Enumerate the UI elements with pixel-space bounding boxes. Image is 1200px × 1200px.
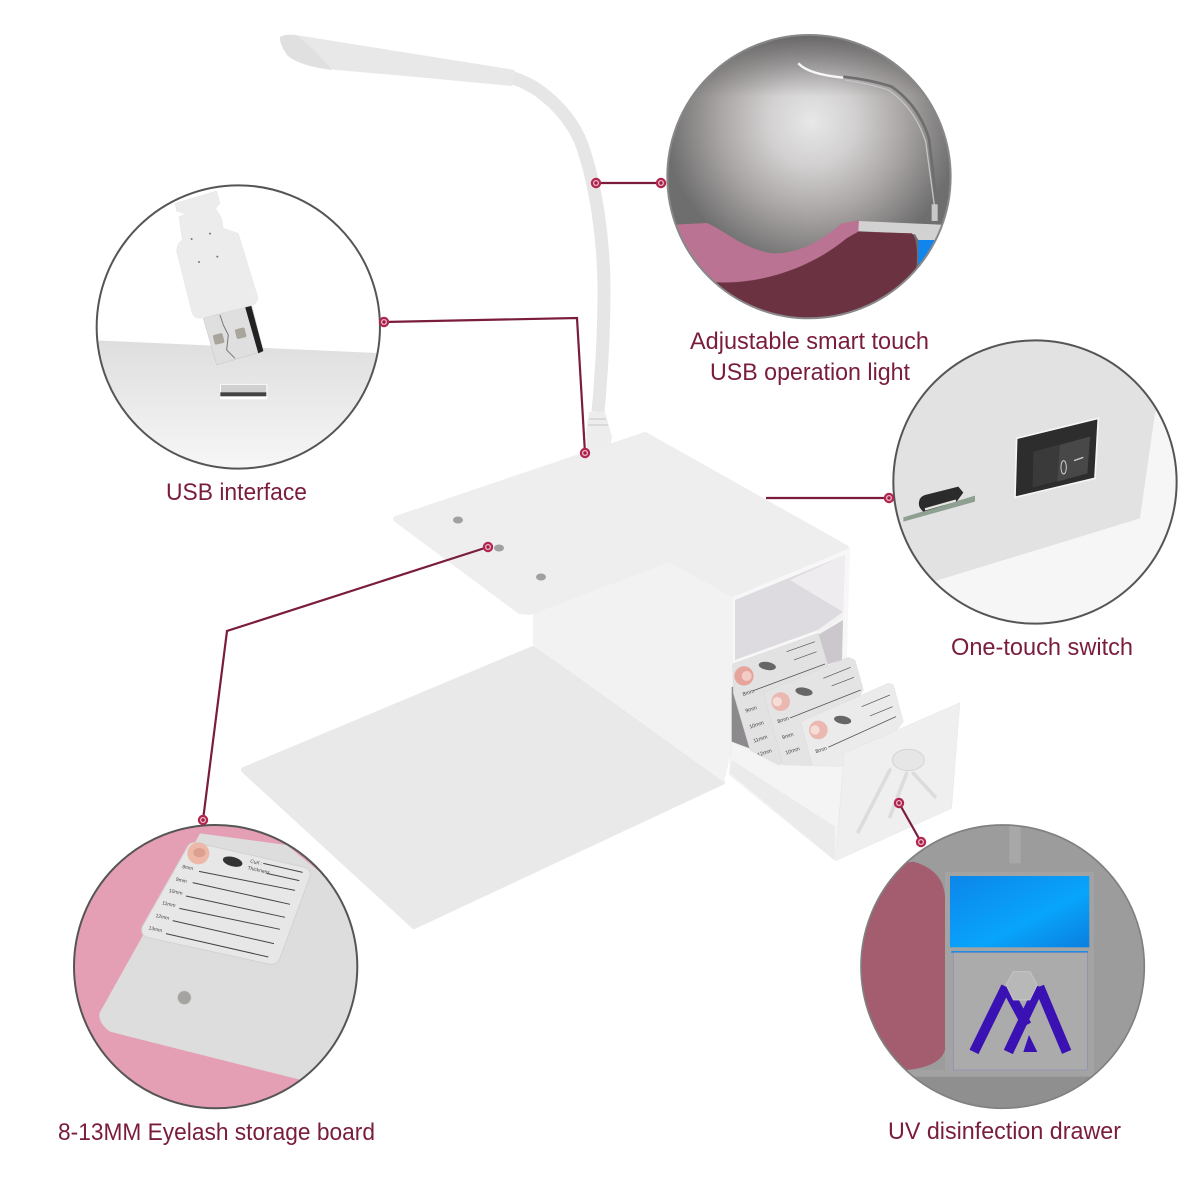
drawer logo and knob: [858, 749, 935, 832]
pink bench: [676, 220, 917, 282]
metal plug: [203, 305, 263, 365]
caption: lamp: Adjustable smart touch: [690, 328, 929, 355]
drawer with lash cards: [729, 633, 960, 861]
lash card: 11mm: [162, 900, 176, 909]
product: top plate: [396, 435, 846, 612]
leader lines: [203, 183, 921, 842]
lamp silhouette: [798, 63, 938, 221]
circle: switch photo: [890, 338, 1180, 628]
circle: UV drawer photo: [860, 823, 1147, 1110]
card 2: [763, 657, 863, 770]
white board: [99, 833, 367, 1093]
lamp: head and gooseneck: [280, 35, 612, 468]
card 3: 8mm: [815, 746, 828, 755]
drawer side: [729, 742, 845, 861]
card 1: [733, 633, 830, 767]
card 1: 12mm: [757, 748, 773, 759]
circle: lamp photo: [665, 33, 955, 325]
product: base plate: [244, 649, 722, 926]
UV logo: [974, 987, 1067, 1052]
lash card: Thickness: [247, 865, 271, 876]
caption: UV drawer: UV disinfection drawer: [888, 1118, 1121, 1145]
lash card: 12mm: [155, 913, 170, 922]
card 1: 8mm: [742, 688, 756, 698]
circle: storage board photo: [70, 820, 367, 1113]
pink cushion: [860, 862, 945, 1070]
cabinet: [945, 872, 1094, 1076]
lash card: 9mm: [175, 877, 187, 885]
caption: USB: USB interface: [166, 479, 307, 506]
plug housing: [175, 191, 258, 318]
lash card: 8mm: [182, 864, 194, 872]
rocker switch: [1015, 418, 1098, 497]
product: column side: [533, 561, 733, 782]
lash card: Curl :: [250, 859, 262, 867]
product: storage compartment front: [733, 548, 850, 760]
card 2: 8mm: [777, 716, 790, 725]
caption: switch: One-touch switch: [951, 634, 1133, 661]
caption: storage board: 8-13MM Eyelash storage board: [58, 1119, 375, 1146]
lash card: 10mm: [168, 888, 183, 897]
micro USB port: [903, 487, 975, 522]
knob: [1006, 972, 1037, 1000]
lash card: 13mm: [148, 925, 163, 934]
USB port: [220, 384, 267, 399]
card 1: 10mm: [749, 720, 765, 731]
caption: lamp: USB operation light: [710, 359, 910, 386]
caption: lamp: [690, 328, 929, 386]
drawer front: [836, 703, 960, 861]
card 2: 9mm: [781, 732, 795, 741]
lash card: [142, 842, 310, 964]
circle: USB photo: [95, 183, 385, 475]
card 1: 11mm: [753, 734, 769, 745]
card 1: 9mm: [745, 705, 758, 715]
card 3: [801, 683, 903, 773]
card 2: 10mm: [785, 746, 801, 757]
callout markers: [198, 178, 926, 847]
